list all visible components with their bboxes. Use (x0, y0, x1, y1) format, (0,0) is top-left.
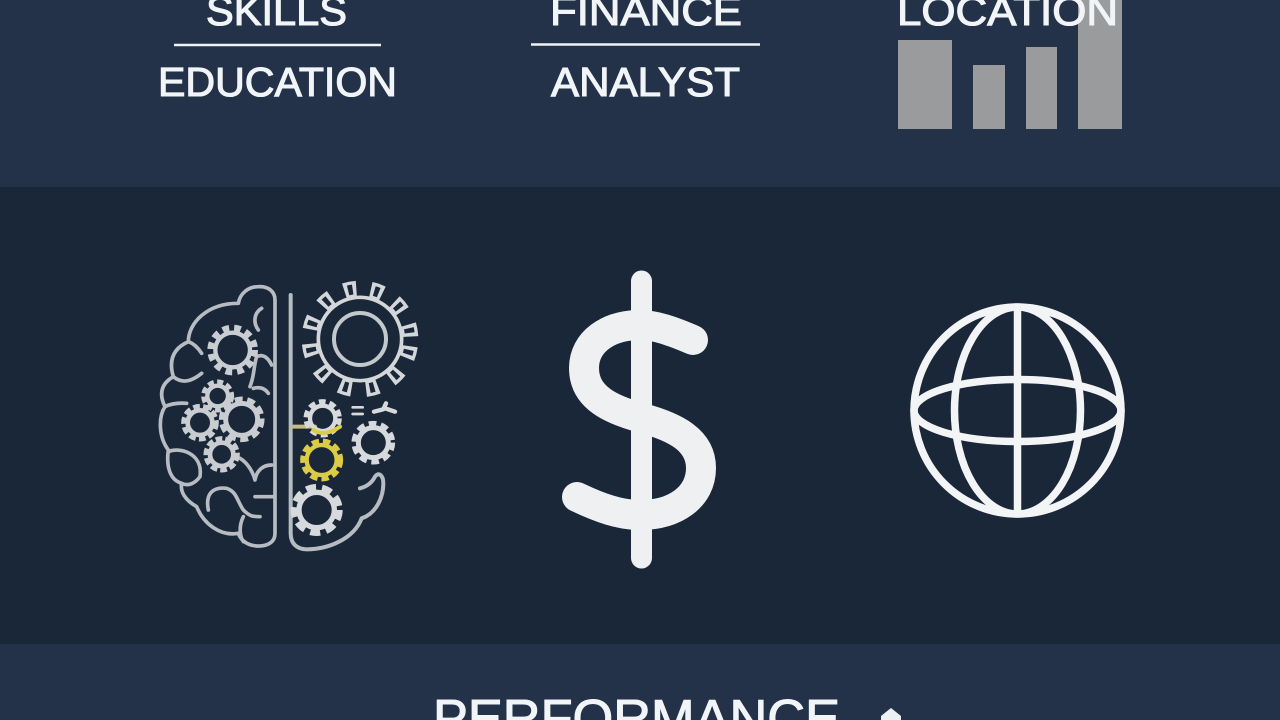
icon: brain with gears (160, 287, 410, 549)
small gears in right hemisphere (294, 402, 395, 533)
panel: bottom band (0, 644, 1280, 720)
heading: analyst: ANALYST (551, 59, 740, 105)
gears in left hemisphere (184, 328, 262, 470)
panel: middle icon band (0, 187, 1280, 644)
brain left hemisphere outline (160, 287, 275, 546)
label group: skills and education (158, 0, 397, 105)
bar chart: four grey bars (898, 0, 1122, 129)
icon: small arrow tip (881, 708, 901, 720)
large gear (310, 289, 410, 389)
icon: dollar sign (577, 281, 701, 558)
yellow gear (303, 427, 341, 479)
brain right hemisphere outline (291, 295, 383, 549)
label group: finance and analyst (531, 0, 760, 105)
panel: top band (0, 0, 1280, 187)
heading: education: EDUCATION (158, 59, 397, 105)
icon: globe (914, 307, 1121, 514)
